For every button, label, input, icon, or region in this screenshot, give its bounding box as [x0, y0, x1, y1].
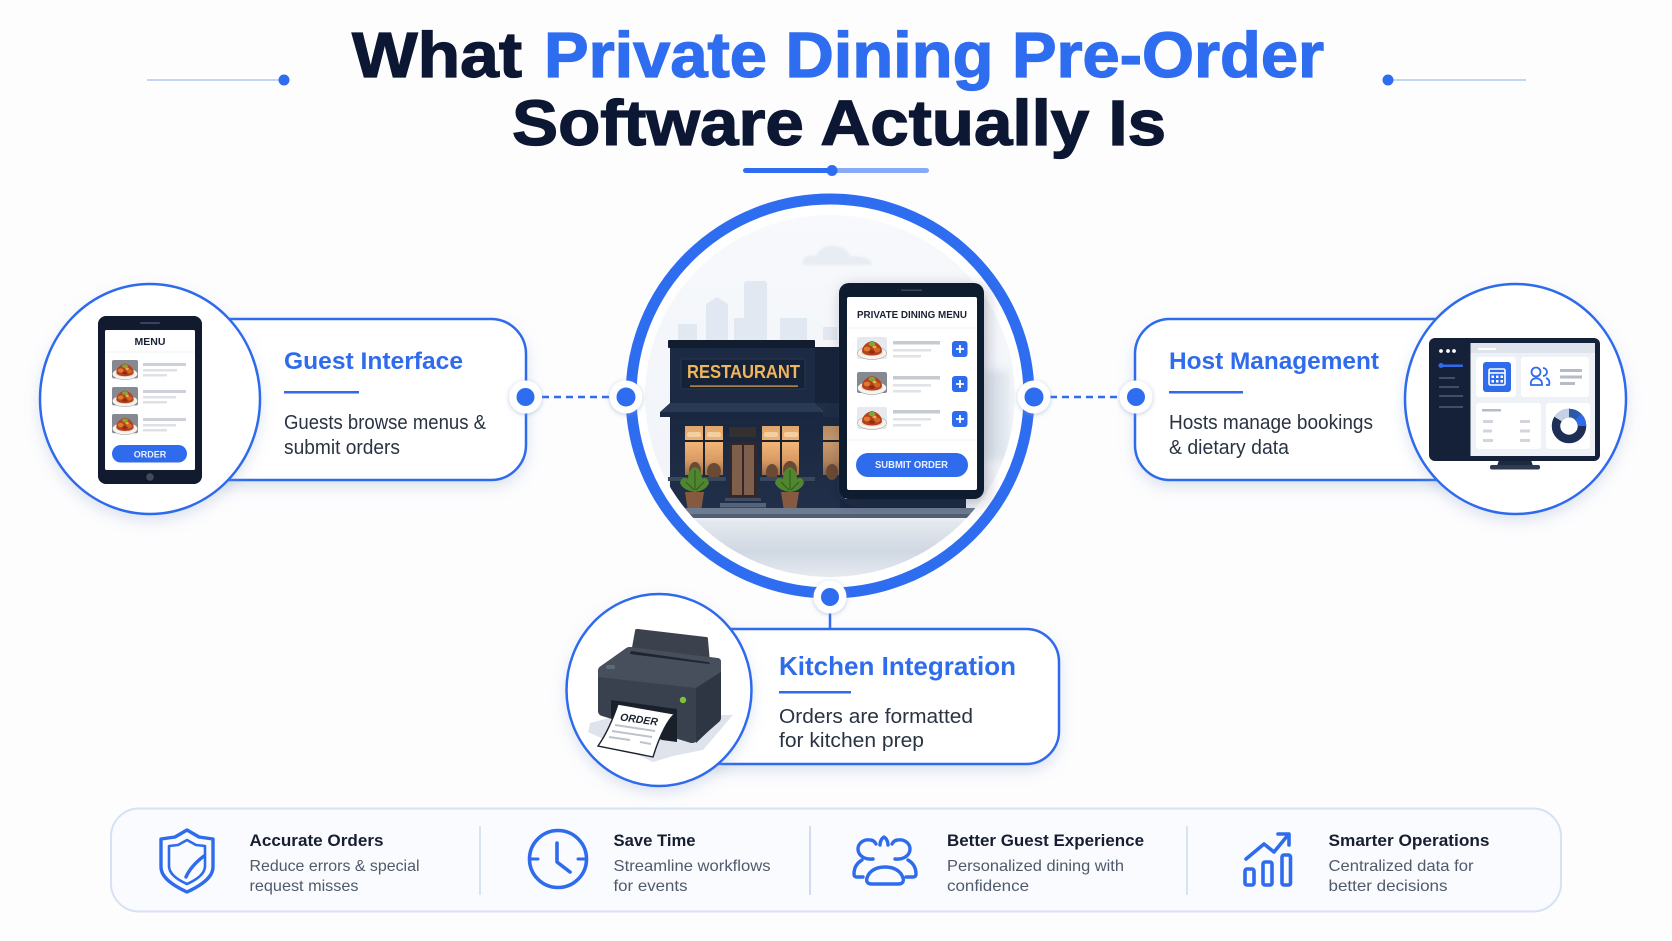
guest description: submit orders [284, 437, 400, 459]
host description [1169, 412, 1373, 459]
title accent left [147, 74, 290, 86]
icon: printer: ORDER [619, 711, 659, 729]
panel: host management [1135, 284, 1626, 514]
host description: & dietary data [1169, 437, 1290, 459]
benefit: save time [614, 831, 770, 895]
benefit: accurate orders: Reduce errors & special [250, 858, 420, 875]
host underline [1169, 391, 1243, 394]
panel: kitchen integration [566, 594, 1059, 786]
node: center left [610, 380, 642, 414]
benefit: accurate orders [250, 831, 420, 895]
door [720, 427, 766, 508]
kitchen description: Orders are formatted [779, 706, 973, 728]
title: Software Actually Is [512, 87, 1166, 159]
benefit: smarter operations: better decisions [1328, 878, 1448, 895]
icon: growth chart [1245, 834, 1290, 885]
kitchen card [690, 629, 1059, 764]
node: guest card [509, 380, 542, 414]
title: What [352, 19, 522, 91]
connector left [542, 396, 610, 398]
connector right [1050, 396, 1120, 398]
kitchen description: for kitchen prep [779, 730, 924, 752]
title accent right [1382, 74, 1526, 86]
guest description [284, 412, 487, 459]
benefit: smarter operations: Smarter Operations [1328, 831, 1490, 850]
guest heading: Guest Interface [284, 348, 463, 375]
restaurant building: RESTAURANT [687, 361, 801, 382]
donut chart [1556, 413, 1582, 439]
kitchen circle [566, 594, 752, 786]
awning [660, 403, 823, 417]
central tablet: PRIVATE DINING MENU [857, 309, 967, 321]
benefit: better guest experience: Personalized dining with [947, 858, 1124, 875]
benefit: accurate orders: Accurate Orders [250, 831, 384, 850]
benefit: smarter operations [1328, 831, 1490, 895]
host heading: Host Management [1169, 348, 1379, 375]
benefit: save time: Streamline workflows [614, 858, 770, 875]
icon: guest tablet: MENU [135, 336, 165, 348]
icon: dashboard monitor [1429, 338, 1600, 470]
kitchen heading: Kitchen Integration [779, 651, 1016, 681]
icon: guest tablet [98, 316, 202, 484]
kitchen underline [779, 691, 851, 694]
guest circle [40, 284, 260, 514]
plants [680, 467, 804, 508]
icon: people [854, 837, 916, 884]
title: Private Dining Pre-Order [544, 19, 1324, 91]
sidewalk [684, 508, 976, 514]
benefit: better guest experience: Better Guest Experience [947, 831, 1144, 850]
benefit: smarter operations: Centralized data for [1328, 858, 1474, 875]
icon: guest tablet: ORDER [134, 450, 167, 460]
host description: Hosts manage bookings [1169, 412, 1373, 434]
kitchen description [779, 706, 973, 752]
node: center right [1018, 380, 1050, 414]
windows [685, 426, 843, 480]
node: center bottom [814, 580, 846, 614]
panel: central illustration [631, 199, 1029, 593]
cloud [803, 245, 872, 265]
benefit: better guest experience [947, 831, 1144, 895]
add buttons [952, 341, 968, 427]
host card [1135, 319, 1481, 480]
node: host card [1120, 380, 1152, 414]
guest underline [284, 391, 359, 394]
host circle [1405, 284, 1626, 514]
skyline [678, 281, 837, 341]
connector bottom [829, 610, 831, 630]
benefit: save time: for events [614, 878, 688, 895]
faint building behind tablet [984, 370, 1008, 460]
central tablet: SUBMIT ORDER [875, 459, 948, 471]
central scene [645, 215, 1015, 577]
central tablet [839, 283, 984, 499]
title underline [743, 165, 929, 176]
benefit: accurate orders: request misses [250, 878, 358, 895]
panel: guest interface [40, 284, 526, 514]
guest description: Guests browse menus & [284, 412, 487, 434]
benefit: better guest experience: confidence [947, 878, 1029, 895]
title [352, 19, 1324, 159]
panel: benefits bar [111, 808, 1561, 912]
icon: shield [161, 830, 213, 892]
central ring [631, 199, 1029, 593]
icon: clock [530, 830, 586, 888]
restaurant building [660, 340, 990, 518]
icon: printer [588, 629, 733, 762]
benefit: save time: Save Time [614, 831, 696, 850]
guest card [180, 319, 526, 480]
